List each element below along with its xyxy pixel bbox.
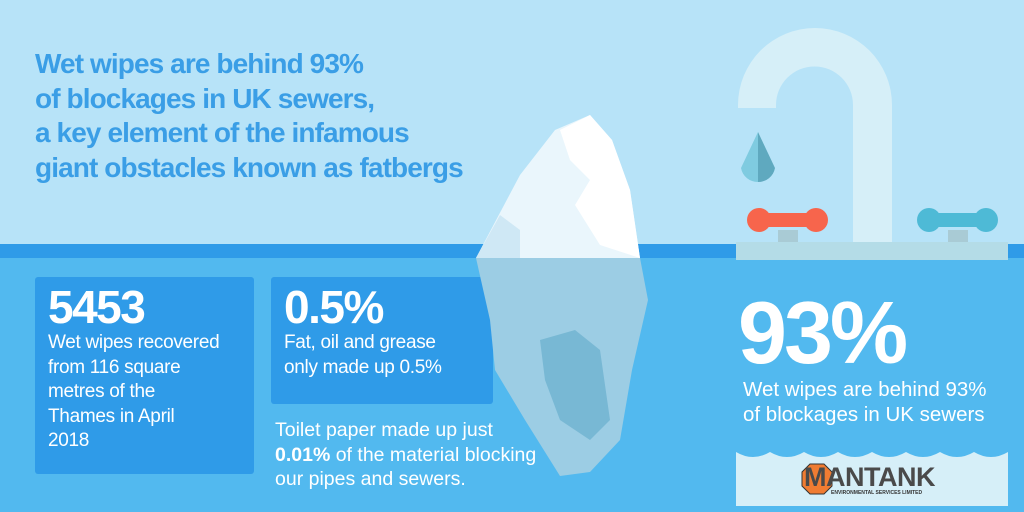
- text block: 93% caption: Wet wipes are behind 93%: [743, 378, 986, 401]
- panel: 5453: metres of the: [48, 381, 155, 402]
- panel: 0.5%: Fat, oil and grease: [284, 332, 436, 353]
- panel: 5453: from 116 square: [48, 356, 180, 378]
- title: giant obstacles known as fatbergs: [35, 152, 463, 182]
- panel: 0.5%: [271, 277, 493, 404]
- logo: Mantank: [736, 452, 1008, 506]
- title: [35, 48, 463, 183]
- title: of blockages in UK sewers,: [35, 82, 374, 114]
- icon: tap: [736, 28, 1008, 260]
- text block: toilet paper: [275, 419, 536, 490]
- icon: water drop: [741, 132, 775, 182]
- big stat: 93%: 93%: [738, 283, 905, 382]
- text block: toilet paper: 0.01% of the material blocking: [275, 444, 536, 466]
- panel: 0.5%: only made up 0.5%: [284, 356, 442, 378]
- text block: 93% caption: of blockages in UK sewers: [743, 402, 985, 426]
- panel: 5453: Wet wipes recovered: [48, 332, 219, 353]
- title: a key element of the infamous: [35, 117, 409, 148]
- panel: 5453: [35, 277, 254, 474]
- text block: toilet paper: our pipes and sewers.: [275, 468, 466, 490]
- logo: Mantank: ENVIRONMENTAL SERVICES LIMITED: [831, 490, 922, 496]
- logo: Mantank: MANTANK: [804, 462, 935, 492]
- panel: 5453: 2018: [48, 430, 89, 451]
- text block: 93% caption: [743, 378, 986, 426]
- title: Wet wipes are behind 93%: [35, 48, 363, 79]
- panel: 0.5%: 0.5%: [284, 281, 383, 333]
- panel: 5453: 5453: [48, 281, 144, 333]
- panel: 5453: Thames in April: [48, 406, 174, 426]
- text block: toilet paper: Toilet paper made up just: [275, 419, 493, 441]
